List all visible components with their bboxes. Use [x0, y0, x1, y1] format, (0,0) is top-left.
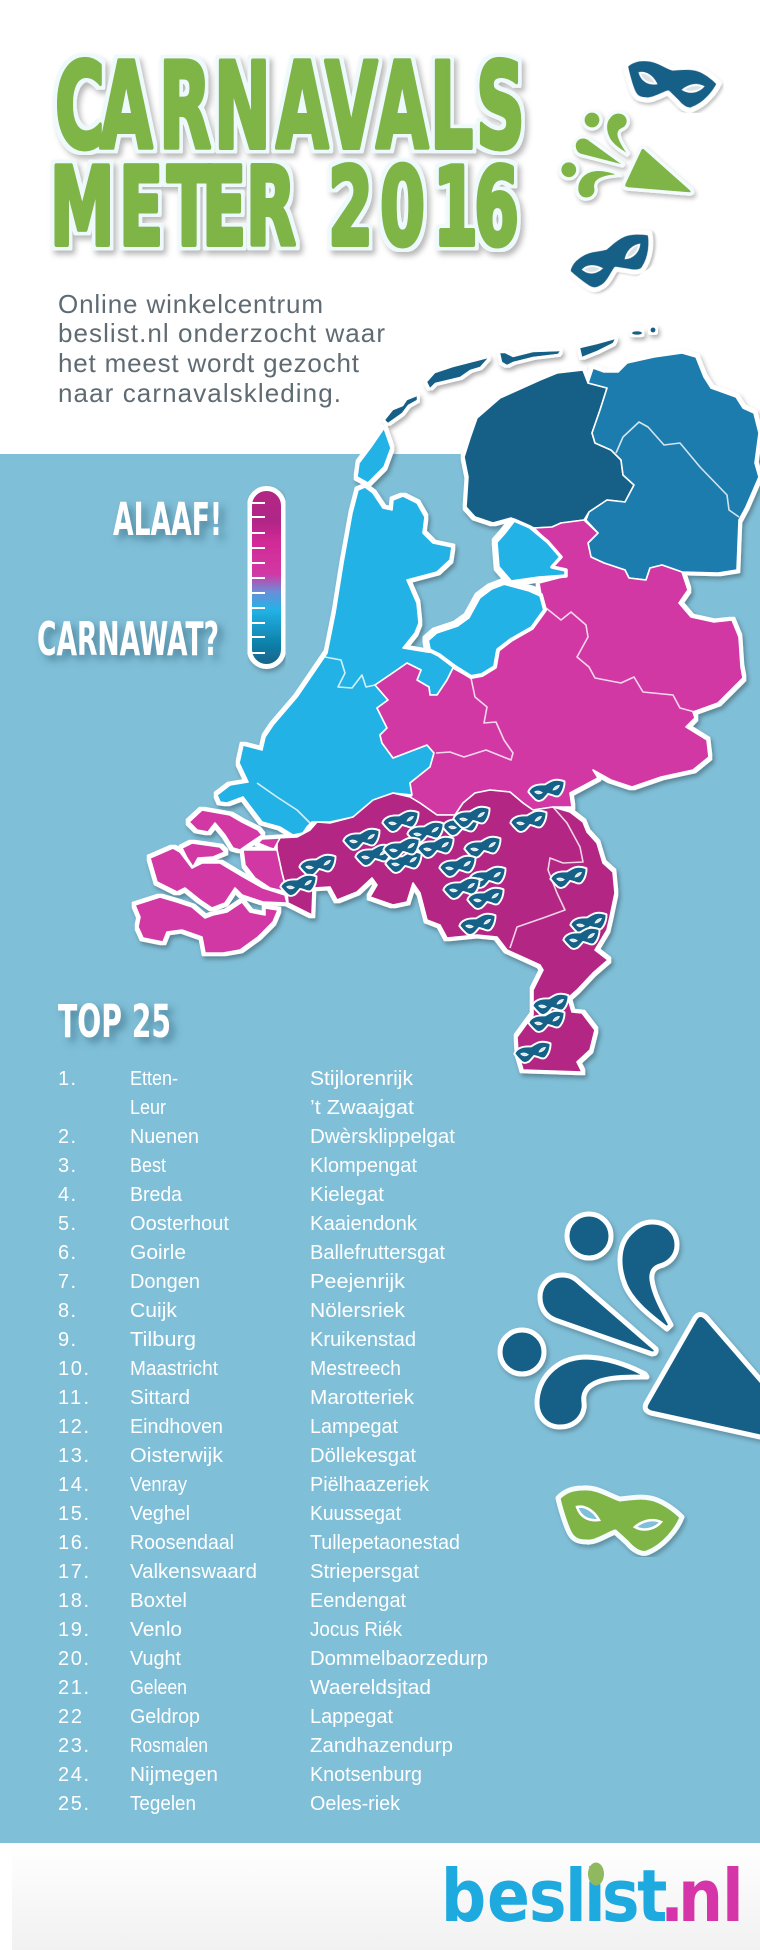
- top 25 list: Sittard: [130, 1387, 190, 1409]
- top 25 list: Maastricht: [130, 1358, 218, 1380]
- top 25 list: 2.: [58, 1126, 76, 1148]
- intro text: beslist.nl onderzocht waar: [58, 318, 385, 348]
- top 25 list: Goirle: [130, 1242, 186, 1264]
- top 25 list: Geldrop: [130, 1706, 200, 1728]
- top 25 list: 1.: [58, 1068, 76, 1090]
- top 25 list: Nölersriek: [310, 1300, 406, 1322]
- top 25 list: Tullepetaonestad: [310, 1532, 460, 1554]
- top 25 list: Boxtel: [130, 1590, 187, 1612]
- province: Noord- and Zuid-Holland: [217, 487, 453, 835]
- top 25 list: 24.: [58, 1764, 89, 1786]
- province: Friesland: [464, 370, 634, 528]
- top 25 list: Nijmegen: [130, 1764, 218, 1786]
- top 25 list: 12.: [58, 1416, 89, 1438]
- top 25 list: 15.: [58, 1503, 89, 1525]
- top 25 list: Tegelen: [130, 1793, 196, 1815]
- top 25 list: Oosterhout: [130, 1213, 229, 1235]
- top 25 list: 19.: [58, 1619, 89, 1641]
- top 25 list: Lampegat: [310, 1416, 398, 1438]
- top 25 list: 9.: [58, 1329, 76, 1351]
- top 25 list: Roosendaal: [130, 1532, 234, 1554]
- province: Noord-Brabant and Limburg: [277, 790, 615, 1072]
- top 25 list: 11.: [58, 1387, 89, 1409]
- top 25 list: Kaaiendonk: [310, 1213, 418, 1235]
- logo: beslist.nl: beslist: [441, 1854, 667, 1938]
- thermometer scale: [250, 488, 284, 666]
- footer band: [12, 1843, 760, 1950]
- top 25 list: 18.: [58, 1590, 89, 1612]
- top 25 list: 17.: [58, 1561, 89, 1583]
- top 25 list: Leur: [130, 1097, 166, 1119]
- top 25 list: Zandhazendurp: [310, 1735, 453, 1757]
- top 25 list: Stijlorenrijk: [310, 1068, 414, 1090]
- top 25 list: Oeles-riek: [310, 1793, 401, 1815]
- top 25 list: Döllekesgat: [310, 1445, 416, 1467]
- top 25 list: Best: [130, 1155, 166, 1177]
- top 25 list: Geleen: [130, 1677, 187, 1699]
- province: Gelderland, Overijssel and Utrecht: [375, 520, 743, 815]
- top 25 list: 21.: [58, 1677, 89, 1699]
- top 25 list: Eendengat: [310, 1590, 406, 1612]
- top 25 list: 6.: [58, 1242, 76, 1264]
- top 25 list: [58, 1068, 488, 1815]
- title: CARNAVALS: [55, 37, 525, 176]
- top 25 list: 10.: [58, 1358, 89, 1380]
- top 25 list: Eindhoven: [130, 1416, 223, 1438]
- top 25 list: 22: [58, 1706, 82, 1728]
- scale label: ALAAF!: ALAAF!: [113, 493, 222, 546]
- top 25 list: Waereldsjtad: [310, 1677, 431, 1699]
- top 25 list: Kuussegat: [310, 1503, 401, 1525]
- top 25 list: 7.: [58, 1271, 76, 1293]
- heading: top 25: TOP 25: [58, 995, 171, 1048]
- logo: beslist.nl: .nl: [660, 1854, 744, 1938]
- icons: masks marking the top 25 places: [279, 773, 611, 1069]
- top 25 list: Dommelbaorzedurp: [310, 1648, 488, 1670]
- top 25 list: Mestreech: [310, 1358, 401, 1380]
- top 25 list: Jocus Riék: [310, 1619, 403, 1641]
- top 25 list: 5.: [58, 1213, 76, 1235]
- top 25 list: 8.: [58, 1300, 76, 1322]
- icon: second blue mask: [564, 216, 664, 305]
- province: Groningen and Drenthe: [586, 353, 759, 580]
- title: [50, 37, 525, 271]
- top 25 list: 25.: [58, 1793, 89, 1815]
- top 25 list: 14.: [58, 1474, 89, 1496]
- intro text: [58, 289, 385, 408]
- top 25 list: Valkenswaard: [130, 1561, 257, 1583]
- top 25 list: Klompengat: [310, 1155, 417, 1177]
- icon: large blue party popper: [500, 1214, 760, 1438]
- top 25 list: Marotteriek: [310, 1387, 415, 1409]
- title: METER 2016: [50, 145, 519, 271]
- scale label: CARNAWAT?: CARNAWAT?: [37, 612, 219, 666]
- Wadden islands: [385, 328, 656, 423]
- top 25 list: Kruikenstad: [310, 1329, 416, 1351]
- top 25 list: 4.: [58, 1184, 76, 1206]
- top 25 list: Peejenrijk: [310, 1271, 406, 1293]
- province: Flevoland: [427, 583, 545, 677]
- top 25 list: Tilburg: [130, 1329, 196, 1351]
- top 25 list: 20.: [58, 1648, 89, 1670]
- top 25 list: Etten-: [130, 1068, 178, 1090]
- top 25 list: Striepersgat: [310, 1561, 419, 1583]
- top 25 list: ’t Zwaajgat: [310, 1097, 414, 1119]
- top 25 list: 16.: [58, 1532, 89, 1554]
- top 25 list: Venray: [130, 1474, 187, 1496]
- top 25 list: Ballefruttersgat: [310, 1242, 445, 1264]
- top 25 list: Piëlhaazeriek: [310, 1474, 430, 1496]
- icon: top blue mask: [624, 58, 720, 111]
- top 25 list: Veghel: [130, 1503, 190, 1525]
- province: Zeeland: [135, 810, 287, 953]
- top 25 list: Kielegat: [310, 1184, 384, 1206]
- blue background panel: [0, 454, 760, 1843]
- intro text: Online winkelcentrum: [58, 289, 323, 319]
- icon: small green party popper: [555, 108, 693, 201]
- top 25 list: Vught: [130, 1648, 181, 1670]
- top 25 list: Breda: [130, 1184, 183, 1206]
- top 25 list: 3.: [58, 1155, 76, 1177]
- map of the Netherlands: [135, 328, 759, 1072]
- top 25 list: Dwèrsklippelgat: [310, 1126, 455, 1148]
- top 25 list: Rosmalen: [130, 1735, 208, 1757]
- top 25 list: 13.: [58, 1445, 89, 1467]
- province: Noordoostpolder: [496, 520, 566, 582]
- province: Texel: [357, 428, 391, 483]
- top 25 list: Nuenen: [130, 1126, 199, 1148]
- top 25 list: Venlo: [130, 1619, 182, 1641]
- top 25 list: Lappegat: [310, 1706, 393, 1728]
- top 25 list: Oisterwijk: [130, 1445, 224, 1467]
- top 25 list: Cuijk: [130, 1300, 178, 1322]
- intro text: naar carnavalskleding.: [58, 378, 341, 408]
- top 25 list: 23.: [58, 1735, 89, 1757]
- top 25 list: Knotsenburg: [310, 1764, 422, 1786]
- top 25 list: Dongen: [130, 1271, 200, 1293]
- intro text: het meest wordt gezocht: [58, 348, 360, 378]
- icon: green mask: [558, 1488, 682, 1553]
